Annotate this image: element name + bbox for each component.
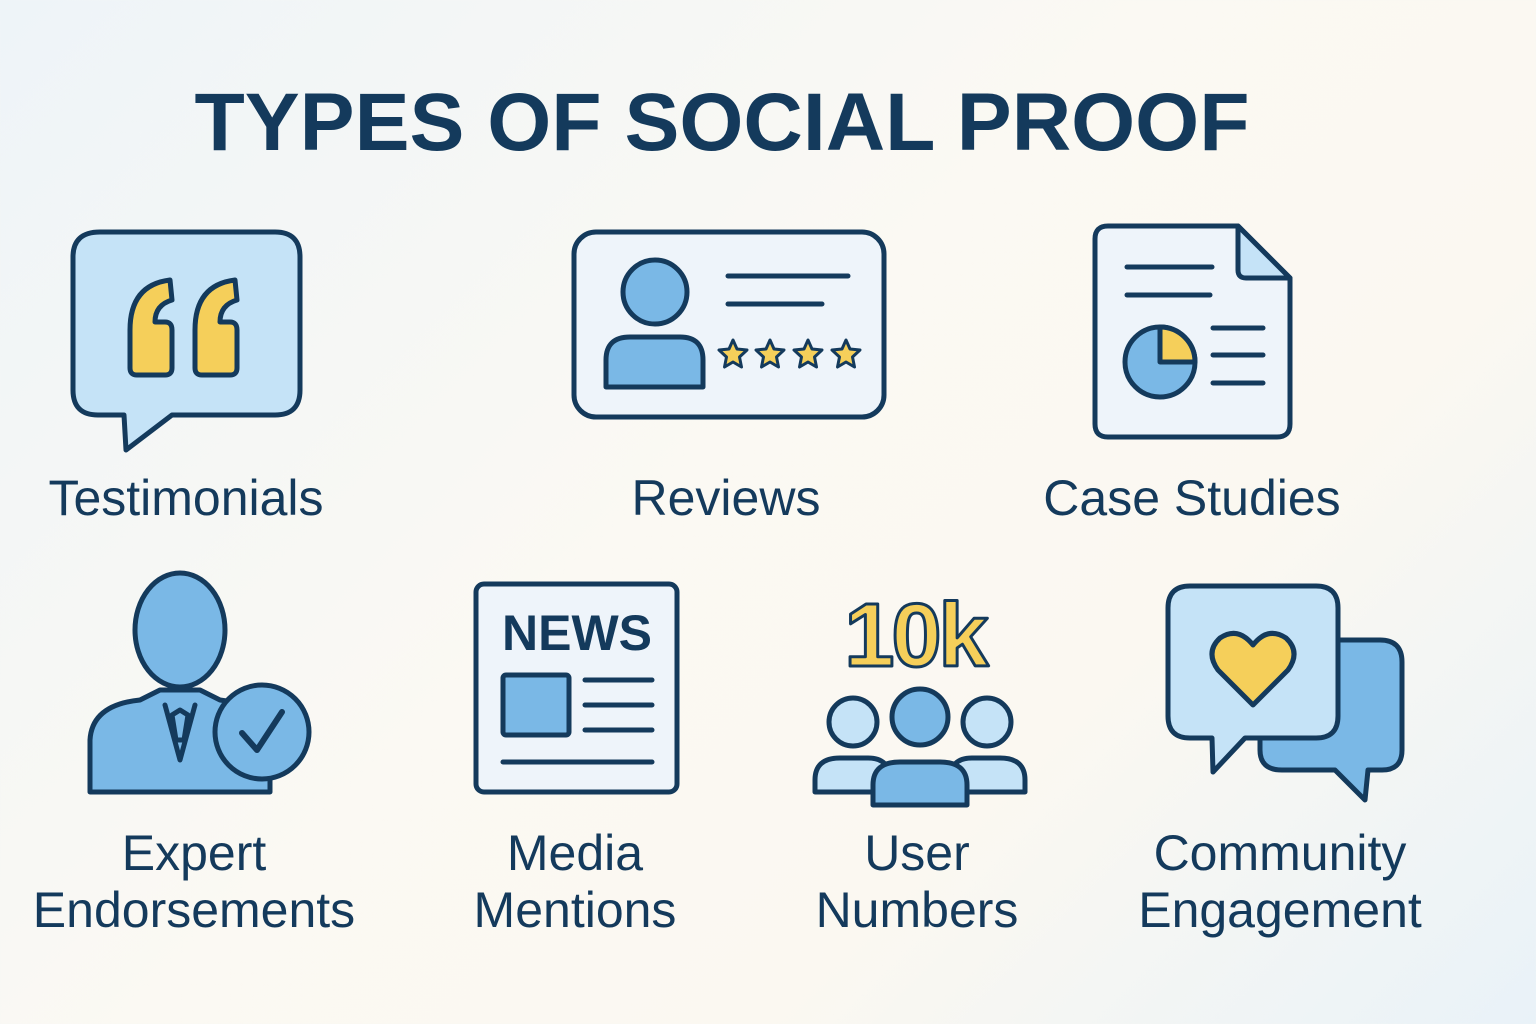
label: case studies: Case Studies — [1043, 470, 1341, 526]
icon: user numbers — [815, 586, 1025, 805]
label: user numbers: User — [864, 825, 970, 881]
icon: case studies document — [1095, 226, 1290, 437]
label: community engagement: Engagement — [1138, 882, 1422, 938]
label: community engagement: Community — [1154, 825, 1406, 881]
icon: user numbers: 10k — [844, 586, 990, 686]
title: TYPES OF SOCIAL PROOF — [194, 77, 1250, 168]
icon: reviews card — [574, 232, 884, 417]
icon: expert endorsement — [90, 573, 309, 792]
label: testimonials: Testimonials — [48, 470, 324, 526]
label: expert endorsements: Endorsements — [33, 882, 355, 938]
label: media mentions: Mentions — [474, 882, 676, 938]
icon: newspaper — [476, 584, 677, 792]
icon: community chat bubbles — [1168, 586, 1402, 800]
icon: newspaper: NEWS — [502, 605, 652, 661]
label: user numbers: Numbers — [816, 882, 1018, 938]
label: reviews: Reviews — [632, 470, 820, 526]
label: expert endorsements: Expert — [122, 825, 266, 881]
label: media mentions: Media — [507, 825, 643, 881]
icon: testimonials speech bubble — [73, 232, 300, 450]
